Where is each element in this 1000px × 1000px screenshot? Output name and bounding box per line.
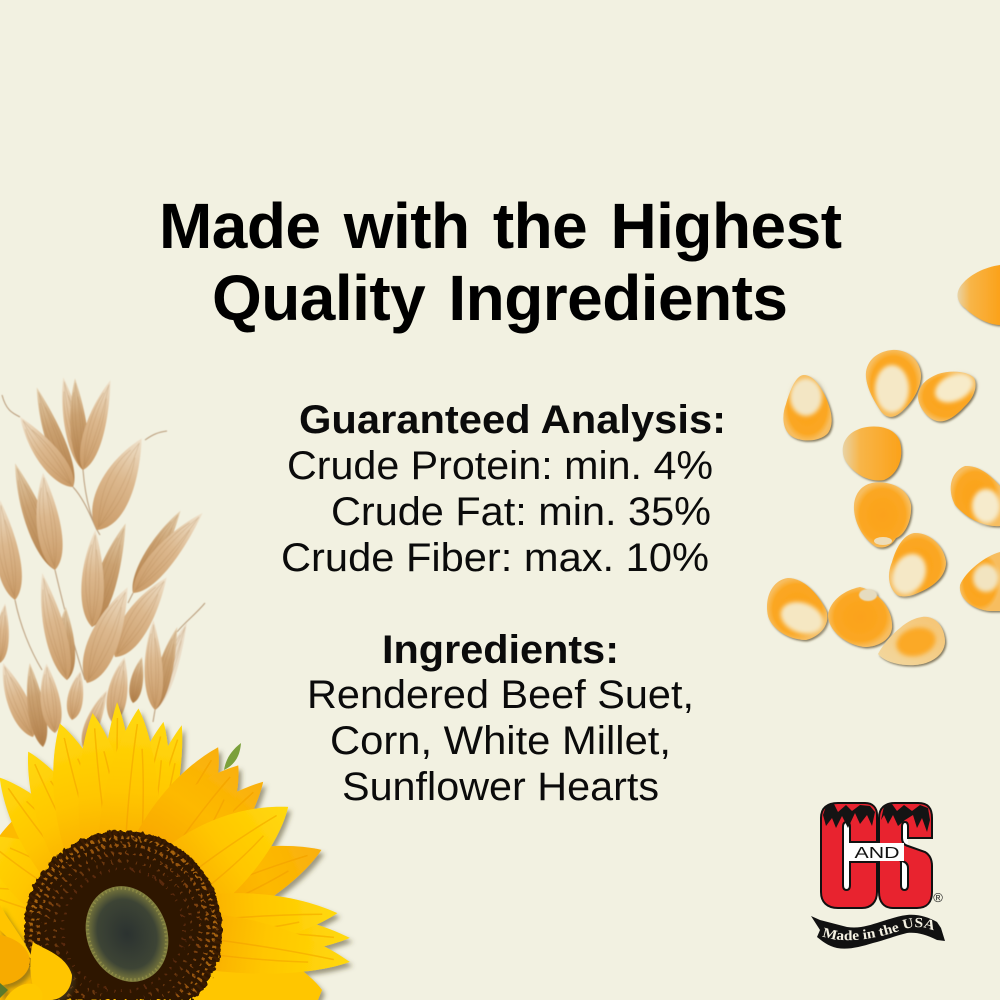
small petals bottom-left	[0, 905, 72, 1000]
corn kernel	[958, 265, 1000, 325]
logo letter C	[821, 803, 877, 908]
corn kernel	[783, 375, 832, 440]
text block: guaranteed analysis: Crude Protein: min. 4%	[287, 444, 713, 488]
corn kernel	[918, 368, 978, 421]
logo registered mark: ®	[933, 890, 943, 905]
logo letter S	[879, 803, 932, 908]
illustration: oat stalks	[0, 375, 211, 750]
sunflower centre	[72, 874, 182, 994]
illustration: sunflower	[0, 702, 354, 1000]
text block: ingredients: Rendered Beef Suet,	[307, 673, 694, 717]
sunflower petals	[0, 702, 354, 1000]
corn kernel	[951, 466, 1000, 526]
logo scorch marks	[823, 804, 930, 832]
sunflower leaf tip	[224, 743, 241, 770]
corn kernel	[886, 533, 946, 600]
text block: guaranteed analysis: Crude Fiber: max. 10%	[281, 536, 709, 580]
logo banner	[811, 915, 945, 949]
corn kernel	[828, 587, 892, 647]
illustration: corn kernels	[767, 265, 1000, 665]
text block: ingredients	[307, 628, 694, 809]
title: Quality Ingredients	[212, 262, 788, 334]
logo AND box: AND	[854, 845, 900, 862]
corn kernel	[767, 578, 828, 640]
corn kernel	[866, 350, 921, 417]
text block: ingredients: Corn, White Millet,	[330, 719, 671, 763]
text block: guaranteed analysis	[281, 398, 726, 580]
logo banner text: Made in the USA	[822, 918, 934, 940]
logo: C and S, Made in the USA	[811, 802, 945, 949]
text block: guaranteed analysis: Guaranteed Analysis:	[299, 398, 726, 442]
text block: ingredients: Sunflower Hearts	[342, 765, 659, 809]
corn kernel	[878, 617, 945, 665]
corn kernel	[843, 427, 901, 480]
corn kernel	[854, 482, 911, 547]
title	[159, 190, 842, 334]
text block: ingredients: Ingredients:	[382, 628, 619, 672]
text block: guaranteed analysis: Crude Fat: min. 35%	[331, 490, 711, 534]
logo AND box	[850, 843, 904, 862]
corn kernel	[960, 552, 1000, 611]
title: Made with the Highest	[159, 190, 842, 262]
sunflower disc	[24, 831, 222, 1000]
